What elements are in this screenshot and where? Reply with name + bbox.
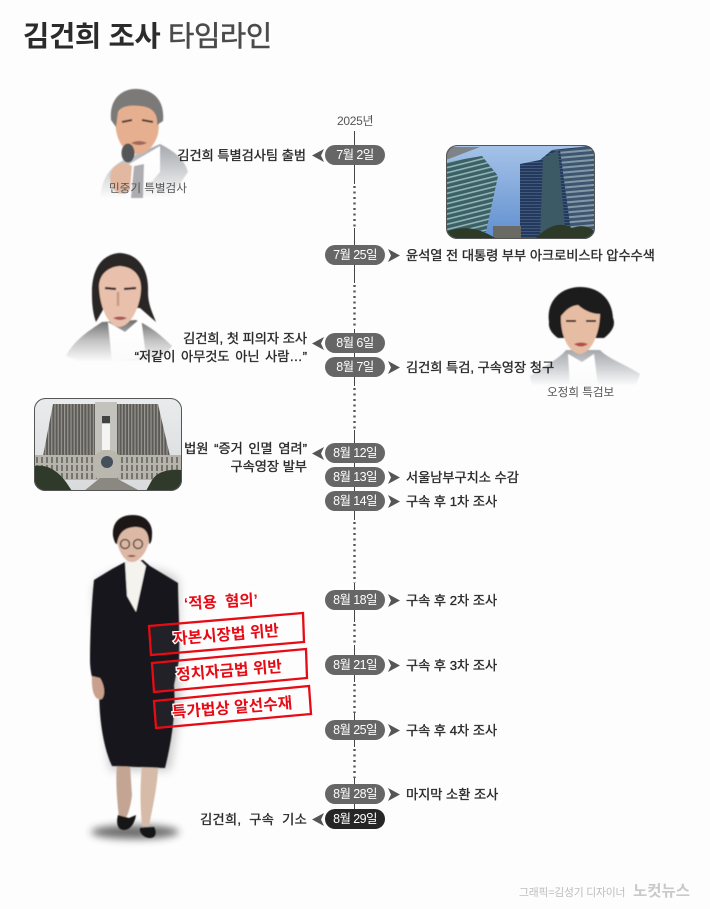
- charge box: special act mediation bribery: [154, 686, 311, 728]
- event 8월 21일: [325, 655, 497, 675]
- timeline axis: [354, 131, 356, 820]
- event 8월 28일: 마지막 소환 조사: [406, 787, 498, 802]
- logo: nocut news: 노컷뉴스: [633, 883, 690, 900]
- event 8월 14일: [325, 491, 497, 511]
- charges callout: [149, 591, 311, 728]
- event 8월 12일: 8월 12일: [333, 446, 377, 460]
- event 8월 29일: 김건희, 구속 기소: [200, 812, 307, 827]
- event 7월 25일: [325, 245, 655, 265]
- photo: special prosecutor Min: [100, 89, 188, 198]
- title: 김건희 조사 타임라인: [23, 21, 272, 53]
- event 7월 25일: 7월 25일: [333, 248, 377, 262]
- event 8월 12일: [184, 441, 385, 474]
- charge box: capital markets act: [149, 613, 304, 655]
- event 8월 13일: [325, 467, 519, 487]
- charge box: capital markets act: 자본시장법 위반: [172, 622, 280, 648]
- event 8월 14일: 구속 후 1차 조사: [406, 494, 497, 509]
- event 8월 21일: 8월 21일: [333, 658, 377, 672]
- event 8월 7일: [325, 357, 554, 377]
- credit: 그래픽=김성기 디자이너: [519, 887, 625, 899]
- event 7월 2일: 김건희 특별검사팀 출범: [177, 148, 306, 163]
- event 8월 25일: [325, 720, 497, 740]
- event 8월 18일: 8월 18일: [333, 593, 377, 607]
- event 7월 2일: [177, 145, 385, 165]
- event 8월 21일: 구속 후 3차 조사: [406, 658, 497, 673]
- event 8월 28일: [325, 784, 498, 804]
- photo: Kim Keon-hee full figure: [90, 515, 180, 839]
- event 8월 28일: 8월 28일: [333, 787, 377, 801]
- event 8월 7일: 8월 7일: [336, 360, 374, 374]
- event 8월 29일: 8월 29일: [333, 812, 377, 826]
- event 8월 7일: 김건희 특검, 구속영장 청구: [406, 360, 554, 375]
- credit: [519, 883, 690, 900]
- event 8월 25일: 구속 후 4차 조사: [406, 723, 497, 738]
- event 8월 14일: 8월 14일: [333, 494, 377, 508]
- event 7월 2일: 7월 2일: [336, 148, 374, 162]
- caption: Oh: 오정희 특검보: [547, 386, 614, 399]
- event 8월 13일: 서울남부구치소 수감: [406, 470, 519, 485]
- charge box: political funds act: 정치자금법 위반: [175, 658, 283, 684]
- callout heading: ‘적용 혐의’: [184, 591, 258, 613]
- event 8월 13일: 8월 13일: [333, 470, 377, 484]
- event 8월 18일: [325, 590, 497, 610]
- charge box: special act mediation bribery: 특가법상 알선수재: [171, 694, 293, 722]
- event 8월 6일: 김건희, 첫 피의자 조사: [183, 331, 307, 346]
- charge box: political funds act: [152, 649, 307, 692]
- illustrations layer: [34, 88, 640, 845]
- photo: Kim first interrogation: [66, 253, 172, 362]
- event 7월 25일: 윤석열 전 대통령 부부 아크로비스타 압수수색: [406, 248, 655, 263]
- photo: Acrovista building: [446, 145, 598, 239]
- event 8월 12일: 법원 “증거 인멸 염려”: [184, 441, 307, 456]
- photo: assistant prosecutor Oh: [530, 287, 640, 386]
- event 8월 6일: [134, 331, 385, 364]
- event 8월 29일: [200, 809, 385, 829]
- year label: 2025년: [337, 114, 373, 128]
- photo: Seoul court building: [34, 398, 182, 491]
- event 8월 18일: 구속 후 2차 조사: [406, 593, 497, 608]
- event 8월 6일: 8월 6일: [336, 336, 374, 350]
- event 8월 12일: 구속영장 발부: [231, 459, 307, 474]
- caption: Min: 민중기 특별검사: [109, 182, 187, 195]
- event 8월 25일: 8월 25일: [333, 723, 377, 737]
- event 8월 6일: “저같이 아무것도 아닌 사람…”: [135, 349, 307, 364]
